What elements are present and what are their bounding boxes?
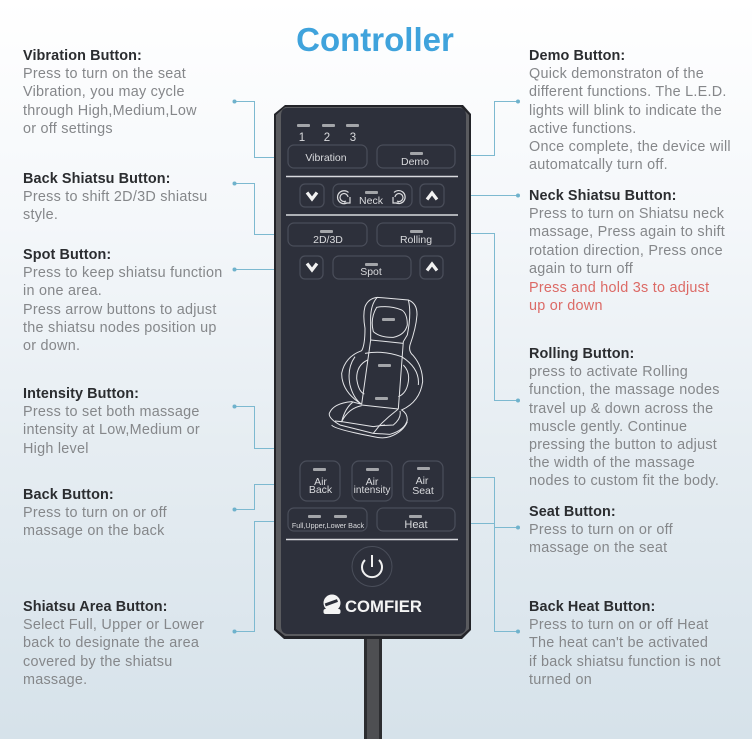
button labels: Neck bbox=[359, 195, 384, 207]
text: spot button: in one area. bbox=[23, 283, 102, 299]
button labels: Full,Upper,Lower Back bbox=[292, 521, 365, 530]
text: vibration button: or off settings bbox=[23, 121, 113, 137]
text: intensity button: High level bbox=[23, 441, 89, 457]
text: neck shiatsu button: again to turn off bbox=[529, 261, 633, 277]
button labels: Spot bbox=[360, 266, 382, 278]
cable bbox=[364, 636, 382, 739]
button labels: Air bbox=[366, 476, 379, 488]
text: seat button bbox=[529, 504, 673, 556]
text: seat button: massage on the seat bbox=[529, 540, 667, 556]
text: demo button bbox=[529, 48, 731, 173]
text: rolling button: pressing the button to adjust bbox=[529, 437, 717, 453]
text: shiatsu area button: Shiatsu Area Button: bbox=[23, 599, 168, 615]
text: demo button: lights will blink to indicate the bbox=[529, 103, 722, 119]
text: neck shiatsu button: rotation direction, Press once bbox=[529, 243, 723, 259]
remote body bbox=[274, 105, 471, 639]
text: intensity button: intensity at Low,Medium or bbox=[23, 422, 200, 438]
text: seat button: Seat Button: bbox=[529, 504, 616, 520]
text: neck shiatsu button: Neck Shiatsu Button: bbox=[529, 188, 677, 204]
divider lines bbox=[286, 176, 458, 540]
callout connector lines bbox=[232, 100, 520, 634]
text: back heat button: The heat can't be activated bbox=[529, 635, 708, 651]
text: shiatsu area button bbox=[23, 599, 204, 688]
title: Controller bbox=[296, 21, 454, 58]
text: rolling button: function, the massage nodes bbox=[529, 382, 720, 398]
button labels: Air bbox=[314, 476, 327, 488]
arrow buttons bbox=[307, 192, 437, 270]
text: vibration button: Vibration, you may cycle bbox=[23, 84, 185, 100]
text: demo button: Quick demonstraton of the bbox=[529, 66, 704, 82]
button labels: 2D/3D bbox=[313, 234, 343, 246]
text: shiatsu area button: covered by the shiatsu bbox=[23, 654, 172, 670]
icon: massage seat bbox=[329, 297, 423, 438]
text: back shiatsu button: style. bbox=[23, 207, 58, 223]
text: spot button: Press to keep shiatsu function bbox=[23, 265, 222, 281]
text: spot button: Press arrow buttons to adjust bbox=[23, 302, 217, 318]
text: spot button: the shiatsu nodes position up bbox=[23, 320, 217, 336]
text: neck shiatsu button: Press to turn on Shiatsu neck bbox=[529, 206, 724, 222]
text: back button: Press to turn on or off bbox=[23, 505, 167, 521]
text: demo button: active functions. bbox=[529, 121, 636, 137]
text: back heat button: turned on bbox=[529, 672, 592, 688]
text: back button bbox=[23, 487, 167, 539]
text: back heat button: if back shiatsu function is not bbox=[529, 654, 721, 670]
text: back button: massage on the back bbox=[23, 523, 165, 539]
text: rolling button: nodes to custom fit the body. bbox=[529, 473, 719, 489]
text: shiatsu area button: back to designate the area bbox=[23, 635, 199, 651]
text: vibration button: Vibration Button: bbox=[23, 48, 142, 64]
text: neck shiatsu button: massage, Press again to shift bbox=[529, 224, 725, 240]
brand logo bbox=[324, 594, 422, 616]
text: vibration button bbox=[23, 48, 197, 137]
text: rolling button: muscle gently. Continue bbox=[529, 419, 687, 435]
text: shiatsu area button: Select Full, Upper or Lower bbox=[23, 617, 204, 633]
LED indicators bbox=[297, 124, 430, 518]
text: back shiatsu button: Back Shiatsu Button: bbox=[23, 171, 171, 187]
text: intensity button: Press to set both massage bbox=[23, 404, 200, 420]
button labels bbox=[292, 132, 434, 531]
text: spot button: Spot Button: bbox=[23, 247, 111, 263]
text: rolling button: Rolling Button: bbox=[529, 346, 634, 362]
text: back shiatsu button: Press to shift 2D/3D shiatsu bbox=[23, 189, 208, 205]
text: rolling button: the width of the massage bbox=[529, 455, 695, 471]
text: back shiatsu button bbox=[23, 171, 208, 223]
button labels: Vibration bbox=[305, 152, 347, 164]
text: intensity button: Intensity Button: bbox=[23, 386, 139, 402]
button labels: Demo bbox=[401, 156, 429, 168]
button labels: 1 bbox=[299, 132, 305, 144]
button labels: Rolling bbox=[400, 234, 432, 246]
icon: power button bbox=[362, 555, 382, 577]
text: spot button: or down. bbox=[23, 338, 80, 354]
rotation icons bbox=[338, 191, 405, 204]
button labels: Seat bbox=[412, 485, 434, 497]
text: demo button: Once complete, the device will bbox=[529, 139, 731, 155]
text: rolling button: press to activate Rolling bbox=[529, 364, 688, 380]
text: back heat button: Press to turn on or off Heat bbox=[529, 617, 709, 633]
button labels: Air bbox=[416, 475, 429, 487]
text: demo button: different functions. The L.E.D. bbox=[529, 84, 727, 100]
text: neck shiatsu button bbox=[529, 188, 725, 314]
button labels: 2 bbox=[324, 132, 330, 144]
button labels: Heat bbox=[404, 519, 428, 531]
button labels: Back bbox=[309, 484, 333, 496]
button outlines bbox=[288, 145, 455, 586]
button labels: intensity bbox=[354, 485, 390, 496]
text: demo button: automatcally turn off. bbox=[529, 157, 668, 173]
button labels: 3 bbox=[350, 132, 356, 144]
text: vibration button: Press to turn on the seat bbox=[23, 66, 186, 82]
text: spot button bbox=[23, 247, 222, 354]
text: back heat button bbox=[529, 599, 721, 688]
controller remote bbox=[274, 105, 471, 639]
text: back heat button: Back Heat Button: bbox=[529, 599, 655, 615]
text: seat button: Press to turn on or off bbox=[529, 522, 673, 538]
text: vibration button: through High,Medium,Low bbox=[23, 103, 197, 119]
text: shiatsu area button: massage. bbox=[23, 672, 87, 688]
text: neck shiatsu button: up or down bbox=[529, 298, 603, 314]
text: rolling button: travel up & down across the bbox=[529, 401, 713, 417]
text: demo button: Demo Button: bbox=[529, 48, 625, 64]
brand logo: COMFIER bbox=[345, 598, 422, 616]
text: neck shiatsu button: Press and hold 3s to adjust bbox=[529, 280, 709, 296]
text: intensity button bbox=[23, 386, 200, 457]
text: rolling button bbox=[529, 346, 720, 489]
text: back button: Back Button: bbox=[23, 487, 114, 503]
